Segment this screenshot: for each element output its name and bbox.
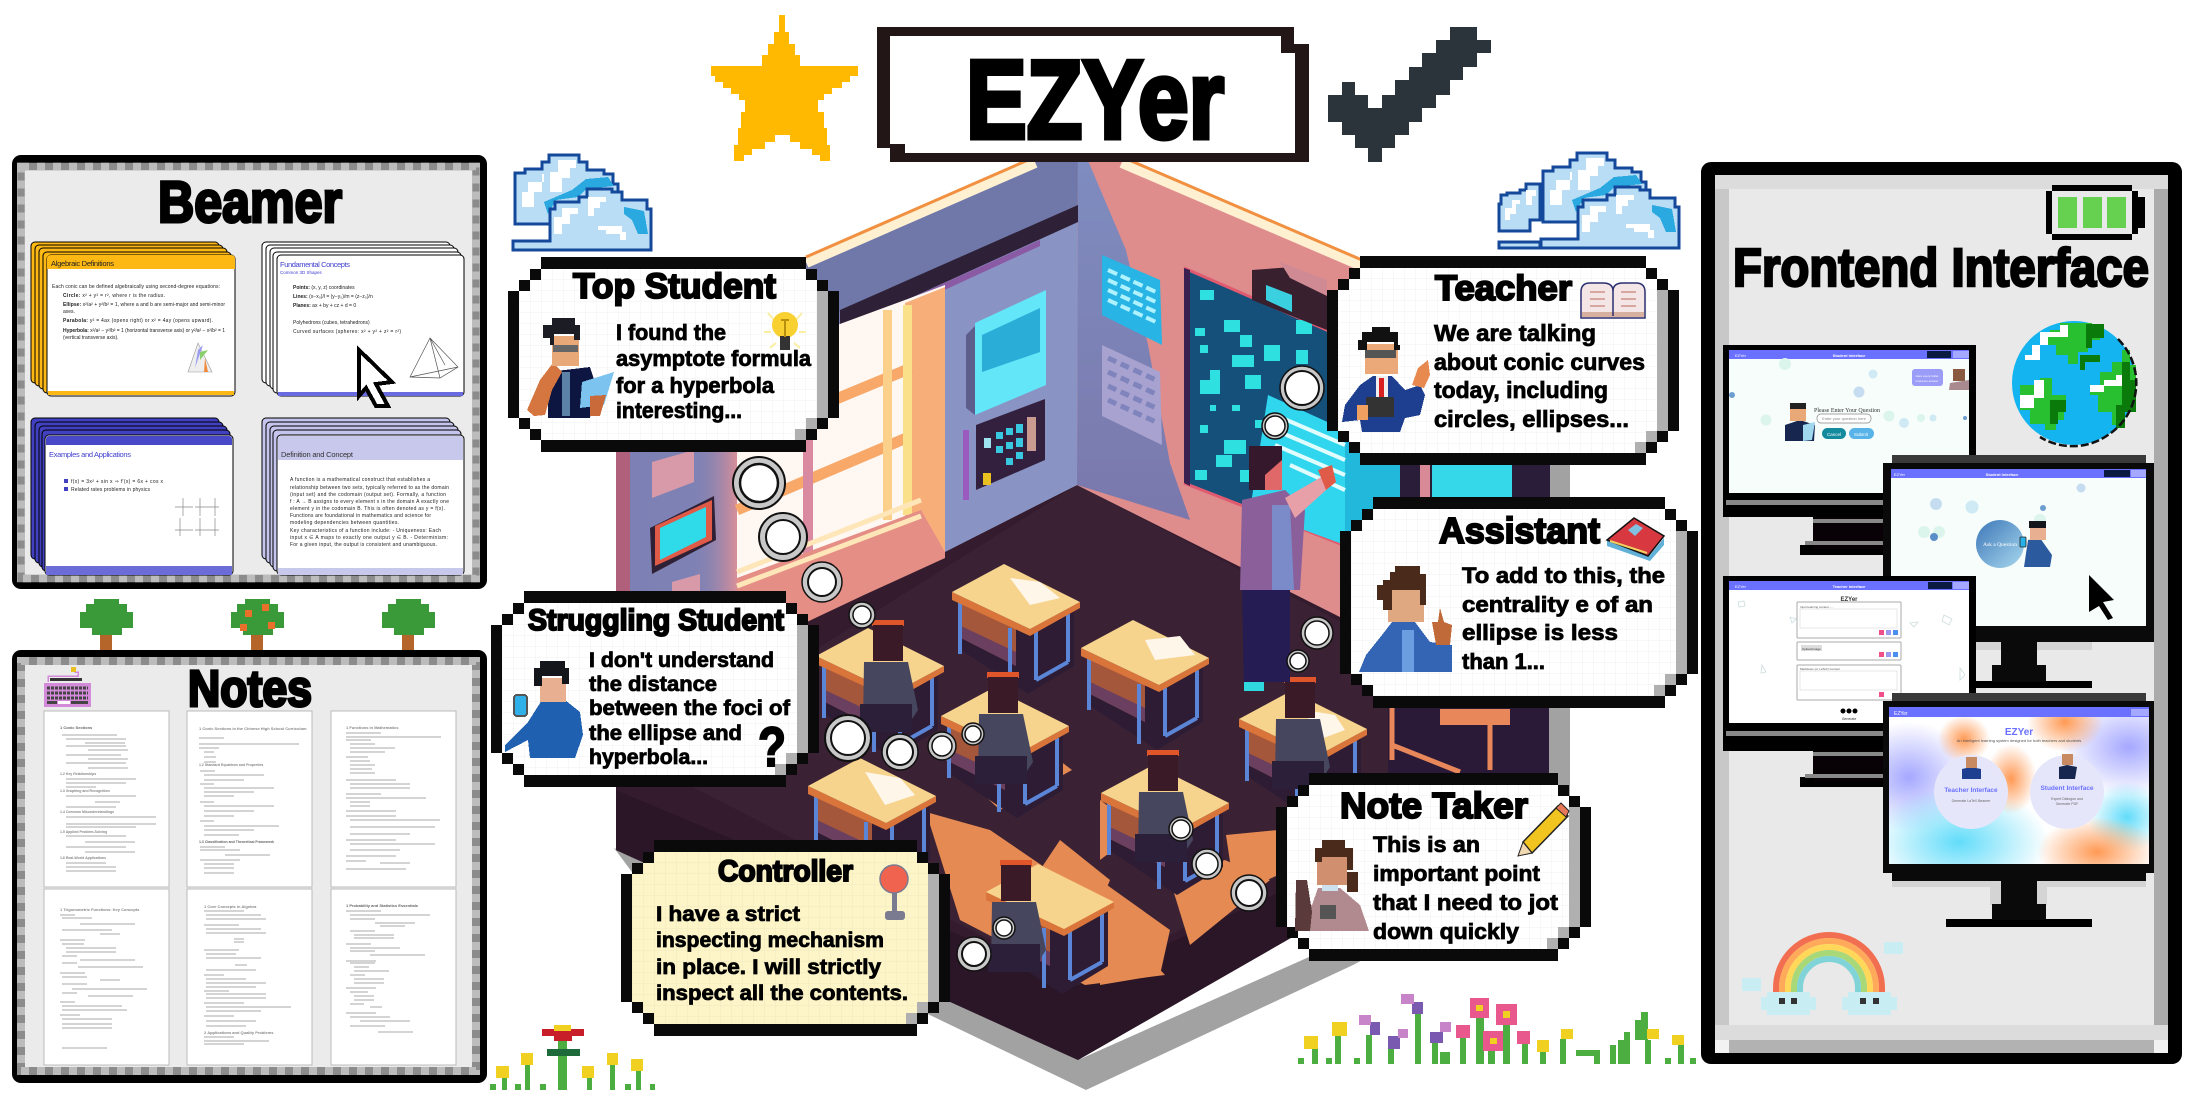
box: Assistant (1340, 497, 1698, 708)
slide stack: fundamental concepts: Fundamental Concepts (280, 260, 350, 269)
slide stack: definition and concept: A function is a mathematical construct that establishes a (290, 477, 430, 483)
monitor: teacher interface screen: Teacher Interface (1833, 584, 1866, 589)
notes page 1: 1.3 Graphing and Recognition (60, 789, 110, 793)
monitor: EZYer home screen: Student Interface (2040, 785, 2094, 792)
bookshelf (1388, 640, 1549, 790)
message: that I need to jot (1373, 890, 1559, 915)
wall art (652, 450, 694, 498)
monitor: EZYer home screen: An intelligent learning system designed for both teachers and students (1957, 738, 2081, 743)
notes page 1: 1.2 Key Relationships (60, 772, 96, 776)
control panel (976, 399, 1045, 490)
heading: Note Taker (1340, 785, 1528, 826)
slide stack: definition and concept (262, 418, 464, 575)
avatar: struggling student (505, 661, 583, 758)
slide stack: definition and concept: element y in the codomain B. This is often denoted as y = f(x). (290, 506, 445, 512)
monitor: student question screen: Cancel (1827, 432, 1841, 437)
message: ellipse is less (1462, 620, 1618, 645)
notes page 4: 1 Trigonometric Functions: Key Concepts (60, 907, 140, 912)
monitor: teacher interface screen: Generate (1842, 717, 1856, 721)
monitor: student question screen: Submit (1854, 432, 1869, 437)
message: I found the (616, 320, 726, 345)
roof edges (806, 162, 1362, 265)
box: Note Taker (1276, 773, 1591, 961)
monitor: student question screen: Student Interface (1833, 353, 1866, 358)
notes page 6: 1 Probability and Statistics Essentials (346, 903, 419, 908)
message: today, including (1434, 377, 1608, 403)
icon: clouds left (513, 155, 651, 250)
slide stack: definition and concept: Functions are foundational in mathematics and science for (290, 513, 431, 519)
slide stack: definition and concept: (input set) and the codomain (output set). Formally, a function (290, 492, 446, 498)
monitor: teacher interface screen: EZYer (1735, 584, 1747, 589)
icon: star (711, 15, 858, 161)
slide stack: definition and concept: input x ∈ A maps to exactly one output y ∈ B. - Determinism: (290, 535, 448, 541)
icon: globe (2012, 321, 2136, 446)
slide stack: examples and applications: Examples and Applications (49, 450, 131, 459)
dark beam (840, 205, 1078, 330)
message: important point (1373, 861, 1541, 886)
message: inspect all the contents. (656, 982, 908, 1005)
monitor: EZYer home screen: Generate LaTeX Beamer (1952, 799, 1991, 803)
monitor: EZYer home screen: Teacher Interface (1944, 787, 1998, 794)
monitor: ask a question screen (1883, 455, 2154, 688)
monitor: student question screen: Please Enter Your Question (1814, 408, 1880, 414)
slide stack: algebraic definitions: axes. (63, 309, 75, 315)
notes page 5 (187, 889, 312, 1065)
desks (808, 564, 1367, 994)
message: centrality e of an (1462, 592, 1653, 617)
icon: cursor (2089, 575, 2114, 620)
message (1434, 320, 1645, 432)
slide stack: examples and applications (31, 418, 233, 575)
notes page 1: 1.6 Real-World Applications (60, 856, 106, 860)
icon: check mark (1328, 27, 1491, 162)
monitor: student question screen: Enter your question here (1822, 416, 1867, 421)
notes page 2: 1.2 Standard Equations and Properties (199, 763, 263, 767)
icon: pencil (1518, 803, 1569, 856)
heading: Struggling Student (528, 604, 784, 637)
slide stack: algebraic definitions: Each conic can be defined algebraically using second-degree equations: (52, 284, 220, 290)
title: EZYer: EZYer (966, 38, 1224, 162)
slide stack: definition and concept: f : A → B assigns to every element x in the domain A exactly one (290, 499, 449, 505)
notes page 4 (44, 889, 169, 1065)
back right neon board (1400, 400, 1550, 530)
message: for a hyperbola (616, 373, 775, 398)
blackboard (1184, 268, 1400, 567)
slide stack: definition and concept: Definition and Concept (281, 450, 354, 459)
slide stack: algebraic definitions (31, 242, 235, 396)
message: inspecting mechanism (656, 929, 884, 952)
icon: light bulb (764, 312, 806, 350)
box: Top Student (508, 257, 839, 452)
message: about conic curves (1434, 349, 1645, 375)
heading: Beamer: Beamer (158, 170, 342, 235)
icon: open book (1581, 283, 1645, 318)
notes page 2: 1 Conic Sections in the Chinese High School Curriculum (199, 726, 307, 731)
notes page 1: 1.5 Applied Problem-Solving (60, 830, 107, 834)
panel: Frontend Interface (1701, 162, 2190, 1064)
icon: question mark: ? (758, 715, 786, 778)
box: Struggling Student (491, 591, 819, 787)
heading: Controller (718, 855, 853, 888)
slide stack: algebraic definitions: Hyperbola: x²/a² − y²/b² = 1 (horizontal transverse axis) or y²/a² − x²/b² = 1 (63, 328, 225, 334)
slide stack: definition and concept: modeling dependencies between quantities. (290, 520, 399, 526)
slide stack: definition and concept: For a given input, the output is consistent and unambiguous. (290, 542, 437, 548)
heading: Notes: Notes (188, 660, 312, 717)
avatar: teacher (1342, 327, 1430, 432)
notes page 1: 1 Conic Sections (60, 725, 93, 730)
monitor: ask a question screen: Student Interface (1986, 472, 2019, 477)
message: asymptote formula (616, 346, 812, 371)
message (589, 649, 791, 769)
icon: mouse cursor (359, 350, 392, 406)
monitor: teacher interface screen: Markdown (or LaTeX) Content (1800, 667, 1840, 671)
icon: red book (1607, 518, 1664, 561)
heading: Top Student (573, 267, 776, 306)
message: down quickly (1373, 919, 1520, 944)
monitor: EZYer home screen (1844, 692, 2190, 927)
notes page 6 (331, 889, 456, 1065)
monitor: student question screen: improves answer (1916, 379, 1938, 383)
monitor: EZYer home screen: EZYer (2005, 727, 2033, 738)
panel: Notes (12, 650, 487, 1083)
message: in place. I will strictly (656, 956, 881, 979)
message: the ellipse and (589, 722, 742, 745)
heading: Assistant (1439, 510, 1600, 551)
monitor: EZYer home screen: Expert Dialogue and (2051, 797, 2083, 801)
monitor: EZYer home screen: EZYer (1894, 711, 1908, 717)
notes page 1 (44, 711, 169, 887)
message: This is an (1373, 832, 1480, 857)
notes page 3 (331, 711, 456, 887)
avatar: note taker (1295, 840, 1369, 931)
message: To add to this, the (1462, 563, 1665, 588)
wall clock box (1252, 267, 1327, 330)
notes page 5: 1 Core Concepts in Algebra (204, 904, 257, 909)
notes page 2 (187, 711, 312, 887)
slide stack: algebraic definitions: Parabola: y² = 4ax (opens right) or x² = 4ay (opens upward). (63, 318, 213, 324)
box: Teacher (1327, 256, 1679, 465)
teacher figure (1240, 446, 1336, 691)
message (616, 320, 812, 423)
message: the distance (589, 673, 717, 696)
heading: Teacher (1435, 269, 1572, 308)
message: interesting... (616, 398, 742, 423)
message (1373, 832, 1559, 944)
slide stack: algebraic definitions: Circle: x² + y² = r², where r is the radius. (63, 293, 165, 299)
slide stack: algebraic definitions: Ellipse: x²/a² + y²/b² = 1, where a and b are semi-major and semi-minor (63, 302, 225, 308)
avatar: top student (527, 318, 614, 418)
slide stack: fundamental concepts: Common 3D Shapes (280, 270, 323, 275)
notes page 1: 1.4 Common Misunderstandings (60, 810, 114, 814)
monitor: ask a question screen: Ask a Question (1983, 542, 2017, 548)
icon: clouds right (1499, 153, 1679, 248)
icon: flowers left (490, 1025, 655, 1090)
avatar: assistant (1359, 566, 1452, 672)
slide stack: definition and concept: relationship between two sets, typically referred to as the domain (290, 485, 449, 491)
slide stack: fundamental concepts (262, 242, 464, 396)
monitor: teacher interface screen: EZYer (1840, 597, 1858, 603)
icon: battery (2046, 185, 2145, 240)
message: I have a strict (656, 903, 800, 926)
message: between the foci of (589, 697, 791, 720)
slide stack: fundamental concepts: Planes: ax + by + cz + d = 0 (293, 303, 356, 309)
left wall screen (975, 290, 1046, 415)
slide stack: fundamental concepts: Polyhedrons (cubes, tetrahedrons) (293, 320, 370, 326)
notes page 5: 2 Applications and Quality Problems (204, 1030, 274, 1035)
monitor: student question screen: Here every bullet (1916, 374, 1938, 378)
slide stack: fundamental concepts: Lines: (x−x₀)/l = (y−y₀)/m = (z−z₀)/n (293, 294, 373, 300)
message (656, 903, 908, 1005)
message: I don't understand (589, 649, 774, 672)
message: circles, ellipses... (1434, 406, 1629, 432)
monitor: EZYer home screen: Generate PDF (2056, 802, 2078, 806)
title: EZYer (877, 27, 1309, 162)
monitor: teacher interface screen: Upload Image (1802, 647, 1821, 651)
slide stack: algebraic definitions: (vertical transverse axis). (63, 335, 119, 341)
slide stack: definition and concept: Key characteristics of a function include: - Uniqueness: Each (290, 528, 441, 534)
monitor: student question screen (1723, 345, 1976, 555)
thought bubbles (733, 366, 1333, 971)
notes page 3: 1 Functions in Mathematics (346, 725, 399, 730)
illustration: isometric pixel classroom (614, 143, 1570, 1090)
monitor: ask a question screen: EZYer (1894, 472, 1906, 477)
notes page 2: 1.3 Classification and Theoretical Framework (199, 840, 274, 844)
message: than 1... (1462, 649, 1545, 674)
slide stack: examples and applications: f(x) = 3x² + sin x ⇒ f′(x) = 6x + cos x (71, 479, 164, 485)
icon: stop sign (880, 865, 908, 920)
slide stack: fundamental concepts: Curved surfaces (spheres: x² + y² + z² = r²) (293, 329, 401, 335)
window (737, 285, 945, 655)
slide stack: algebraic definitions: Algebraic Definitions (51, 259, 114, 268)
monitor: student question screen: EZYer (1735, 353, 1747, 358)
icon: rainbow (1742, 935, 1903, 1015)
message (1462, 563, 1665, 674)
right wall (1077, 143, 1549, 722)
message: hyperbola... (589, 746, 708, 769)
icon: flowers right (1298, 994, 1696, 1064)
students (860, 620, 1330, 972)
left wall (616, 143, 1078, 715)
right wall small screen (1102, 255, 1162, 345)
icon: trees (80, 599, 435, 650)
icon: keyboard (44, 667, 91, 707)
monitor: teacher interface screen: Input learning content...... (1800, 605, 1834, 609)
sunlit floor patches (926, 715, 1278, 985)
slide stack: examples and applications: Related rates problems in physics (71, 487, 150, 493)
message: We are talking (1434, 320, 1596, 346)
slide stack: fundamental concepts: Points: (x, y, z) coordinates (293, 285, 355, 291)
monitor: teacher interface screen (1723, 576, 1976, 787)
panel: Beamer (12, 155, 487, 589)
box: Controller (621, 840, 950, 1036)
